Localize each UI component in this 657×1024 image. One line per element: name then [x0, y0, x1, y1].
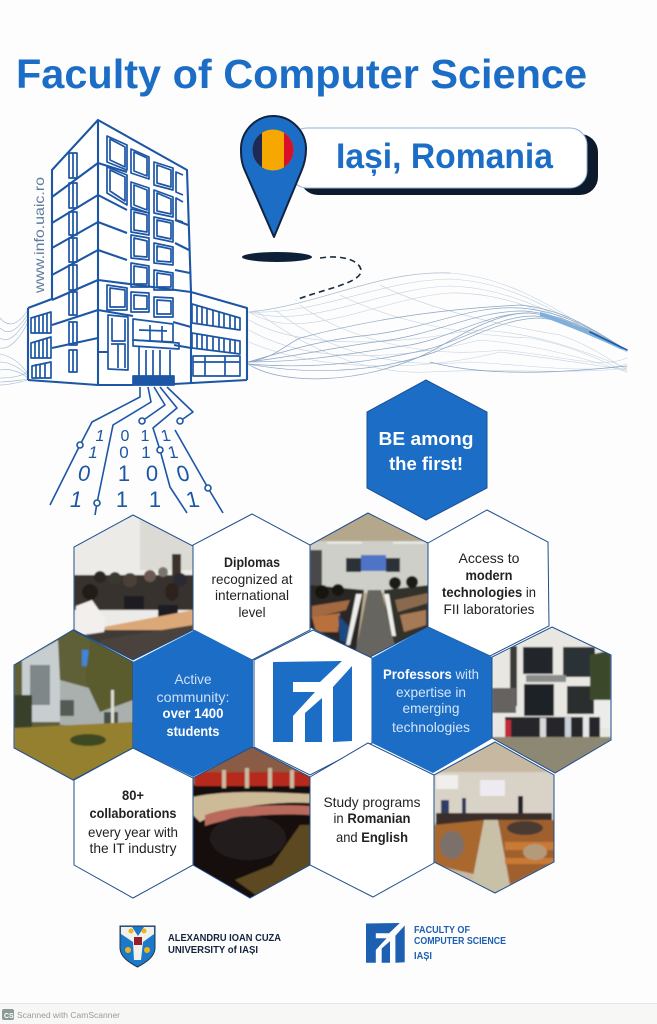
hexagon: access to modern technologies [428, 510, 549, 656]
hexagon: BE among the first: the first! [389, 453, 463, 474]
binary digits: 1 [166, 442, 180, 462]
hexagon: access to modern technologies: modern [466, 567, 512, 583]
hexagon: diplomas: international [215, 587, 289, 603]
hexagon: active community: Active [174, 671, 212, 687]
hexagon: diplomas: recognized at [212, 571, 293, 587]
binary digits: 1 [159, 427, 172, 445]
hexagon: 80+ collaborations: collaborations [90, 805, 177, 821]
right wing windows [192, 304, 240, 376]
binary digits: 0 [78, 461, 91, 486]
photo hexagon: faculty building exterior [14, 630, 134, 782]
binary digits: 0 [119, 443, 129, 462]
binary digits: 1 [141, 443, 151, 462]
binary digits [70, 427, 202, 512]
university name: ALEXANDRU IOAN CUZA [168, 933, 281, 944]
photo hexagon: students at laptops [74, 515, 194, 662]
binary digits: 1 [70, 487, 82, 512]
website url: www.info.uaic.ro [31, 177, 47, 294]
hexagon: active community: students [166, 723, 220, 739]
photo hexagon: conference audience [434, 742, 555, 894]
faculty name: IAȘI [414, 951, 432, 962]
main entrance [133, 319, 179, 385]
university crest [120, 926, 155, 967]
photo hexagon: aula with audience [193, 745, 311, 899]
photo hexagon: group at faculty entrance [492, 627, 612, 775]
hexagon: study programs [310, 743, 434, 897]
title: Faculty of Computer Science [16, 51, 587, 97]
binary digits: 1 [149, 487, 161, 512]
hexagon: diplomas: level [238, 604, 266, 620]
faculty name: COMPUTER SCIENCE [414, 936, 506, 947]
hexagon: access to modern technologies: FII laboratories [444, 601, 534, 617]
binary digits: 0 [146, 461, 158, 486]
university name [168, 933, 281, 956]
faculty name [414, 925, 506, 962]
hexagon: 80+ collaborations: 80+ [122, 787, 144, 803]
hexagon: active community [133, 630, 253, 777]
location label [290, 128, 598, 195]
building illustration [28, 120, 247, 385]
hexagon: 80+ collaborations [74, 748, 193, 898]
left wing windows [31, 312, 51, 378]
hexagon: access to modern technologies: technologies in [442, 584, 536, 600]
hexagon: access to modern technologies: Access to [458, 550, 520, 566]
faculty logo small [366, 923, 405, 963]
dashed route [296, 257, 361, 300]
binary digits: 1 [96, 428, 104, 445]
hexagon: diplomas: Diplomas [224, 554, 280, 570]
hexagon: active community: community: [156, 689, 230, 705]
faculty name: FACULTY OF [414, 925, 470, 936]
hexagon: study programs: Study programs [324, 794, 420, 810]
pin shadow [242, 252, 312, 262]
hexagon: FII logo [254, 630, 372, 775]
hexagon: 80+ collaborations: the IT industry [90, 840, 176, 856]
hexagon: professors: emerging [402, 700, 460, 716]
scanner watermark: CS [4, 1013, 14, 1020]
binary digits: 1 [88, 443, 98, 462]
binary digits: 1 [183, 487, 202, 512]
hexagon: study programs: in Romanian [334, 810, 410, 826]
hexagon: active community: over 1400 [162, 705, 224, 721]
location label: Iași, Romania [336, 137, 554, 176]
hexagon: 80+ collaborations: every year with [88, 824, 178, 840]
hexagon: professors: expertise in [396, 684, 466, 700]
binary digits: 1 [116, 487, 128, 512]
tower left-face narrow windows [69, 153, 77, 372]
university name: UNIVERSITY of IAȘI [168, 945, 258, 956]
hexagon: diplomas [193, 514, 310, 660]
hexagon: professors [372, 627, 493, 773]
wave graphic: right of building [248, 273, 627, 379]
hexagon: BE among the first [367, 380, 487, 520]
binary digits: 0 [121, 428, 130, 445]
hexagon: study programs: and English [336, 829, 408, 845]
binary digits: 0 [174, 461, 192, 486]
map pin with Romanian flag [241, 116, 306, 237]
hexagon: BE among the first: BE among [378, 428, 474, 449]
circuit traces [50, 387, 223, 515]
hexagon: professors: technologies [392, 719, 470, 735]
scanner watermark: Scanned with CamScanner [17, 1010, 120, 1020]
binary digits: 1 [141, 428, 150, 445]
hexagon: professors: Professors with [383, 666, 479, 682]
photo hexagon: lecture hall [310, 513, 430, 662]
binary digits: 1 [118, 461, 130, 486]
tower right-face windows [107, 136, 183, 370]
wave graphic: left of building [0, 310, 28, 385]
